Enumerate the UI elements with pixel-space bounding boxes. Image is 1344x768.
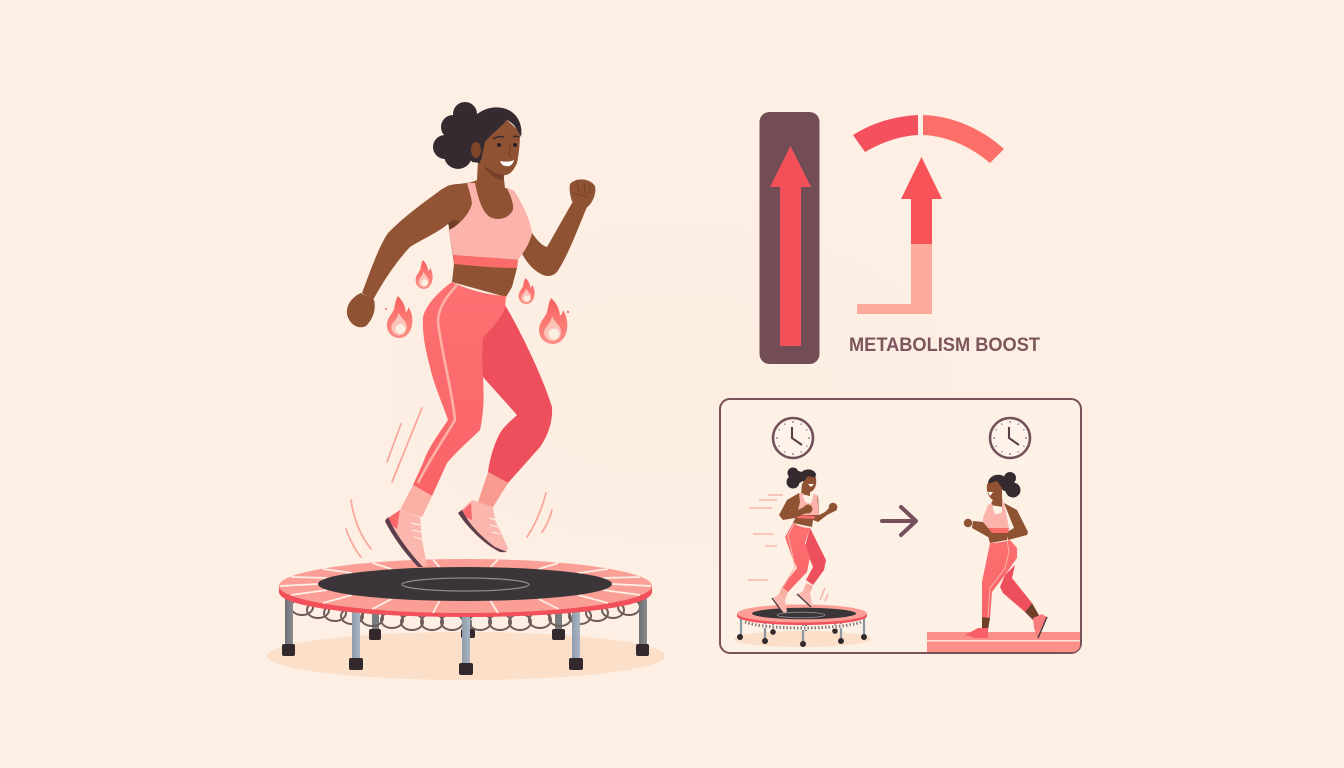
jumping mat bbox=[318, 567, 612, 601]
back arm bbox=[813, 495, 837, 522]
torso skin bbox=[987, 533, 1008, 543]
pad spokes bbox=[280, 560, 651, 613]
front arm bbox=[362, 184, 470, 300]
smile bbox=[500, 160, 514, 166]
main figure: woman jumping bbox=[346, 102, 595, 567]
front sock bbox=[400, 485, 432, 517]
metabolism bar with arrow bbox=[760, 112, 820, 364]
front arm bbox=[779, 493, 809, 520]
red rim bbox=[279, 586, 652, 617]
icon: flame small right bbox=[519, 278, 535, 304]
hair bun bbox=[433, 102, 477, 169]
right fist bbox=[570, 179, 595, 208]
back arm bbox=[1004, 503, 1028, 540]
calves bbox=[982, 617, 990, 630]
bra bbox=[983, 503, 1009, 528]
pad bbox=[279, 559, 652, 613]
up arrow bbox=[770, 146, 811, 346]
legging stripe bbox=[418, 285, 457, 483]
left fist bbox=[347, 293, 375, 327]
rear legs bbox=[369, 612, 565, 640]
leggings bbox=[1000, 565, 1032, 612]
shoes bbox=[965, 628, 988, 638]
front legging bbox=[413, 282, 506, 496]
icon: flame large right bbox=[539, 298, 569, 344]
springs bbox=[291, 599, 640, 630]
leggings bbox=[805, 528, 826, 585]
running track bbox=[927, 632, 1080, 652]
face bbox=[478, 120, 520, 175]
torso skin bbox=[793, 514, 817, 527]
back arm bbox=[505, 190, 587, 276]
rising arrow chart bbox=[857, 157, 942, 314]
back legging bbox=[470, 305, 552, 483]
bra band bbox=[453, 255, 518, 268]
mat ring bbox=[402, 578, 529, 591]
back sock bbox=[477, 472, 508, 507]
icon: flame large left bbox=[385, 296, 412, 338]
ear bbox=[471, 142, 481, 158]
gauge arc bbox=[853, 115, 1004, 163]
icon: clock left bbox=[773, 418, 813, 458]
mini trampoline bbox=[733, 604, 871, 647]
eyebrows and eyes bbox=[493, 136, 519, 157]
mini figure: jumping bbox=[748, 468, 837, 613]
icon: flame small left bbox=[416, 260, 433, 289]
motion lines bbox=[346, 408, 552, 557]
bra bbox=[449, 183, 532, 260]
hair cap bbox=[466, 107, 521, 163]
neck and face bbox=[801, 476, 816, 496]
socks and shoes bbox=[778, 587, 788, 600]
front shoe bbox=[385, 510, 427, 567]
back shoe bbox=[458, 500, 508, 553]
icon: clock right bbox=[990, 418, 1030, 458]
hair bbox=[786, 468, 816, 488]
hair bbox=[988, 472, 1020, 498]
trampoline: large bbox=[267, 559, 665, 680]
mini figure: running bbox=[964, 472, 1047, 638]
front legs bbox=[282, 598, 649, 675]
arrow between figures bbox=[882, 507, 916, 535]
neck and torso skin bbox=[447, 160, 522, 297]
neck shadow bbox=[484, 167, 505, 180]
armpit shadow bbox=[446, 218, 460, 232]
speed lines bbox=[748, 495, 828, 601]
floor shadow bbox=[267, 632, 665, 680]
face and neck bbox=[987, 481, 1003, 507]
panel: comparison bbox=[720, 399, 1081, 653]
bra bbox=[797, 493, 819, 515]
label: metabolism boost: METABOLISM BOOST bbox=[849, 334, 1040, 356]
front arm bbox=[972, 521, 992, 537]
